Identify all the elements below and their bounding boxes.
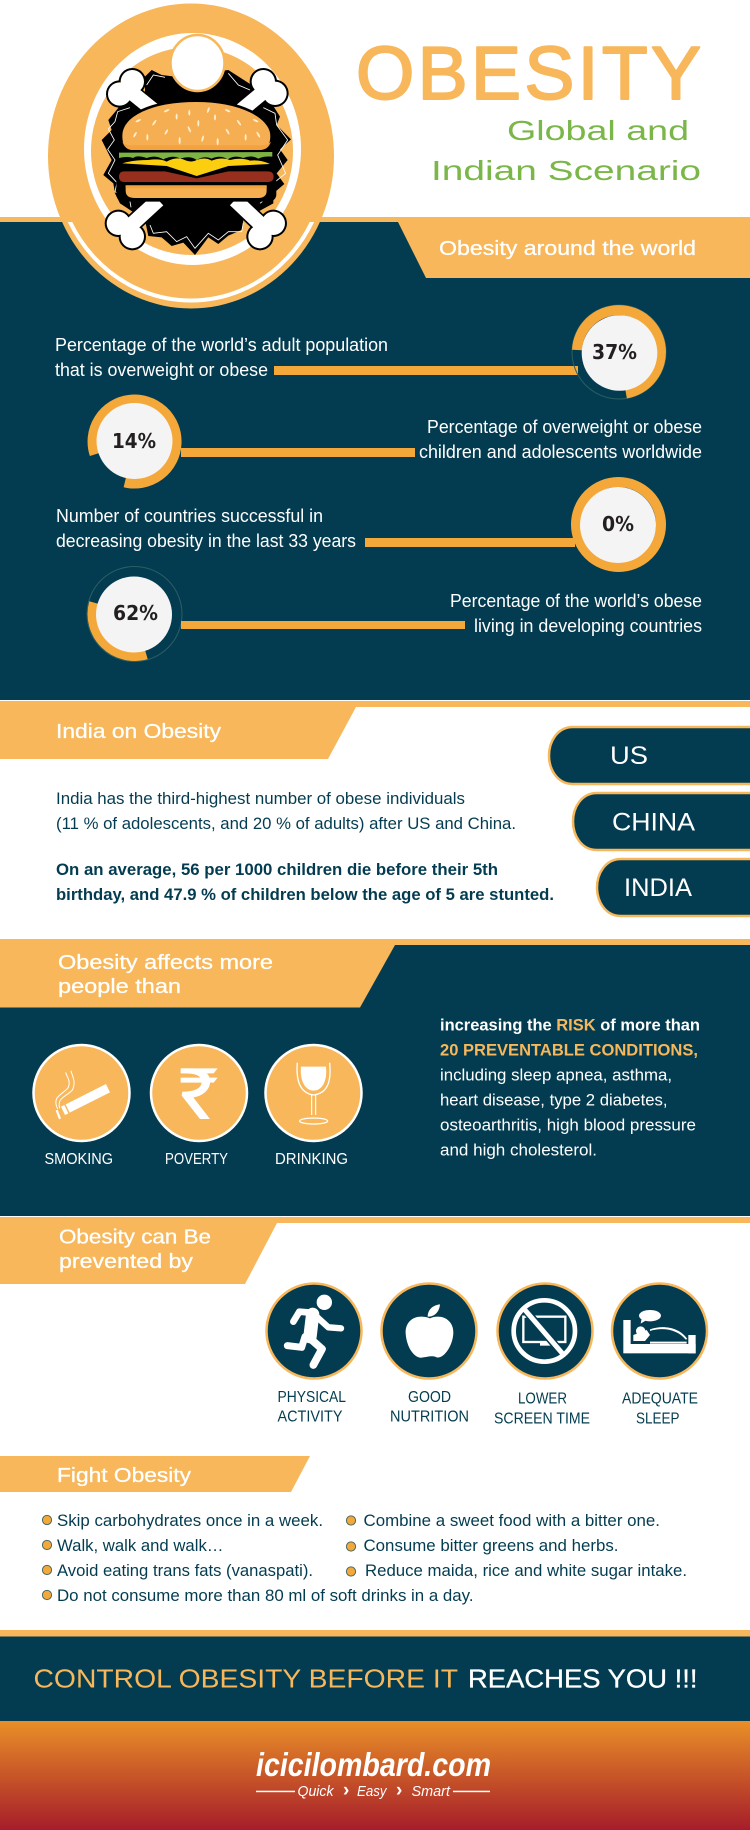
list: tips: Avoid eating trans fats (vanaspati). [57, 1562, 313, 1580]
stat row: 62% [87, 566, 702, 662]
ranking pill: India [597, 859, 750, 916]
labels: prevention methods: SCREEN TIME [494, 1410, 590, 1428]
stat row: 0%: decreasing obesity in the last 33 years [56, 530, 356, 551]
text block: risk: heart disease, type 2 diabetes, [440, 1090, 668, 1110]
stat row: 37%: 37% [592, 340, 637, 364]
list: tips: Consume bitter greens and herbs. [364, 1537, 618, 1555]
icon: burger badge [102, 68, 291, 255]
callout: control obesity [0, 1630, 750, 1722]
icon: apple [382, 1284, 476, 1378]
text block: child mortality [56, 860, 554, 904]
labels: prevention methods: PHYSICAL [278, 1389, 346, 1406]
stat row: 62%: Percentage of the world’s obese [450, 590, 702, 611]
callout: control obesity: CONTROL OBESITY BEFORE IT [34, 1664, 458, 1694]
stat row: 37%: Percentage of the world’s adult population [55, 334, 388, 355]
labels: affected groups [44, 1151, 348, 1168]
stat row: 14%: Percentage of overweight or obese [427, 416, 702, 437]
text block: child mortality: birthday, and 47.9 % of children below the age of 5 are stunted. [56, 885, 554, 904]
panel: obesity affects more people than [0, 939, 750, 1216]
list: tips: Do not consume more than 80 ml of soft drinks in a day. [57, 1587, 474, 1605]
text block: risk: and high cholesterol. [440, 1140, 597, 1160]
text block: risk: including sleep apnea, asthma, [440, 1066, 672, 1084]
text block: child mortality: On an average, 56 per 1000 children die before their 5th [56, 860, 498, 879]
banner: obesity around the world: Obesity around the world [439, 238, 696, 260]
banner: India on obesity [0, 701, 356, 759]
labels: prevention methods: ADEQUATE [622, 1390, 698, 1408]
labels: prevention methods: SLEEP [636, 1410, 680, 1428]
stat row: 62%: 62% [113, 601, 158, 625]
emblem: burger with crossbones [48, 4, 334, 308]
icon: sleep [612, 1284, 707, 1378]
text block: risk: 20 PREVENTABLE CONDITIONS, [440, 1040, 698, 1060]
text block: risk [440, 1016, 700, 1160]
subtitle: Global and [507, 115, 689, 146]
banner: prevented by: Obesity can Be [59, 1226, 211, 1248]
banner: fight obesity [0, 1456, 310, 1492]
icon: head [170, 35, 224, 91]
text block: third-highest: (11 % of adolescents, and 20 % of adults) after US and China. [56, 814, 516, 833]
footer: icicilombard.com [0, 1721, 750, 1830]
list: tips: Reduce maida, rice and white sugar intake. [365, 1562, 687, 1580]
title: OBESITY [356, 31, 701, 115]
list: tips: Skip carbohydrates once in a week. [57, 1512, 323, 1530]
list: tips: Combine a sweet food with a bitter one. [364, 1512, 660, 1530]
panel: obesity around the world [0, 217, 750, 700]
labels: prevention methods [278, 1389, 698, 1428]
icon: rupee [151, 1045, 247, 1141]
subtitle: Indian Scenario [431, 155, 701, 186]
icon: physical activity [266, 1284, 362, 1378]
ranking pill: China: CHINA [612, 808, 695, 836]
list: tips [42, 1512, 687, 1605]
banner: affects more people [0, 939, 398, 1008]
ranking pill: US [549, 727, 750, 784]
banner: prevented by: prevented by [59, 1251, 193, 1273]
tagline: Smart [412, 1784, 451, 1800]
icon: burger [116, 101, 276, 202]
text block: risk: increasing the RISK of more than [440, 1016, 700, 1034]
stat row: 14%: children and adolescents worldwide [419, 441, 702, 462]
stat row: 14% [93, 400, 702, 484]
stat row: 37%: that is overweight or obese [55, 359, 268, 380]
icon: smoking [34, 1045, 130, 1141]
tagline: › [396, 1780, 402, 1801]
icon: no screen [498, 1284, 592, 1378]
labels: affected groups: POVERTY [165, 1151, 228, 1168]
tagline: Quick [298, 1784, 334, 1800]
stat row: 37% [55, 305, 666, 399]
ranking pill: US: US [610, 742, 648, 770]
tagline: Easy [357, 1784, 387, 1800]
ranking pill: India: INDIA [624, 874, 692, 902]
labels: prevention methods: NUTRITION [390, 1408, 469, 1426]
labels: prevention methods: LOWER [518, 1390, 567, 1408]
labels: affected groups: SMOKING [44, 1151, 113, 1168]
subtitle [431, 115, 701, 186]
callout: control obesity: REACHES YOU !!! [468, 1664, 698, 1694]
footer: icicilombard.com: icicilombard.com [256, 1746, 491, 1783]
stat row: 0% [56, 482, 661, 567]
stat row: 62%: living in developing countries [474, 615, 702, 636]
tagline: › [343, 1780, 349, 1801]
banner: prevented by [0, 1217, 280, 1284]
banner: obesity around the world [395, 217, 750, 278]
text block: risk: osteoarthritis, high blood pressure [440, 1116, 696, 1134]
icon: bones [105, 68, 289, 250]
labels: affected groups: DRINKING [275, 1151, 348, 1168]
labels: prevention methods: ACTIVITY [278, 1408, 343, 1426]
text block: third-highest [56, 789, 516, 833]
list: tips: Walk, walk and walk… [57, 1537, 224, 1555]
banner: affects more people: Obesity affects more [58, 952, 273, 974]
panel: fight obesity [0, 1456, 687, 1605]
banner: affects more people: people than [58, 976, 181, 998]
title [356, 31, 701, 186]
stat row: 0%: 0% [602, 512, 634, 536]
panel: India on obesity [0, 701, 750, 916]
stat row: 0%: Number of countries successful in [56, 505, 323, 526]
text block: third-highest: India has the third-highest number of obese individuals [56, 789, 465, 808]
banner: fight obesity: Fight Obesity [57, 1465, 191, 1487]
ranking pill: China [573, 793, 750, 850]
icon: wine glass [266, 1045, 362, 1141]
labels: prevention methods: GOOD [408, 1389, 451, 1406]
banner: India on obesity: India on Obesity [56, 721, 221, 743]
panel: prevention [0, 1217, 750, 1428]
stat row: 14%: 14% [112, 429, 156, 453]
tagline [256, 1780, 490, 1801]
